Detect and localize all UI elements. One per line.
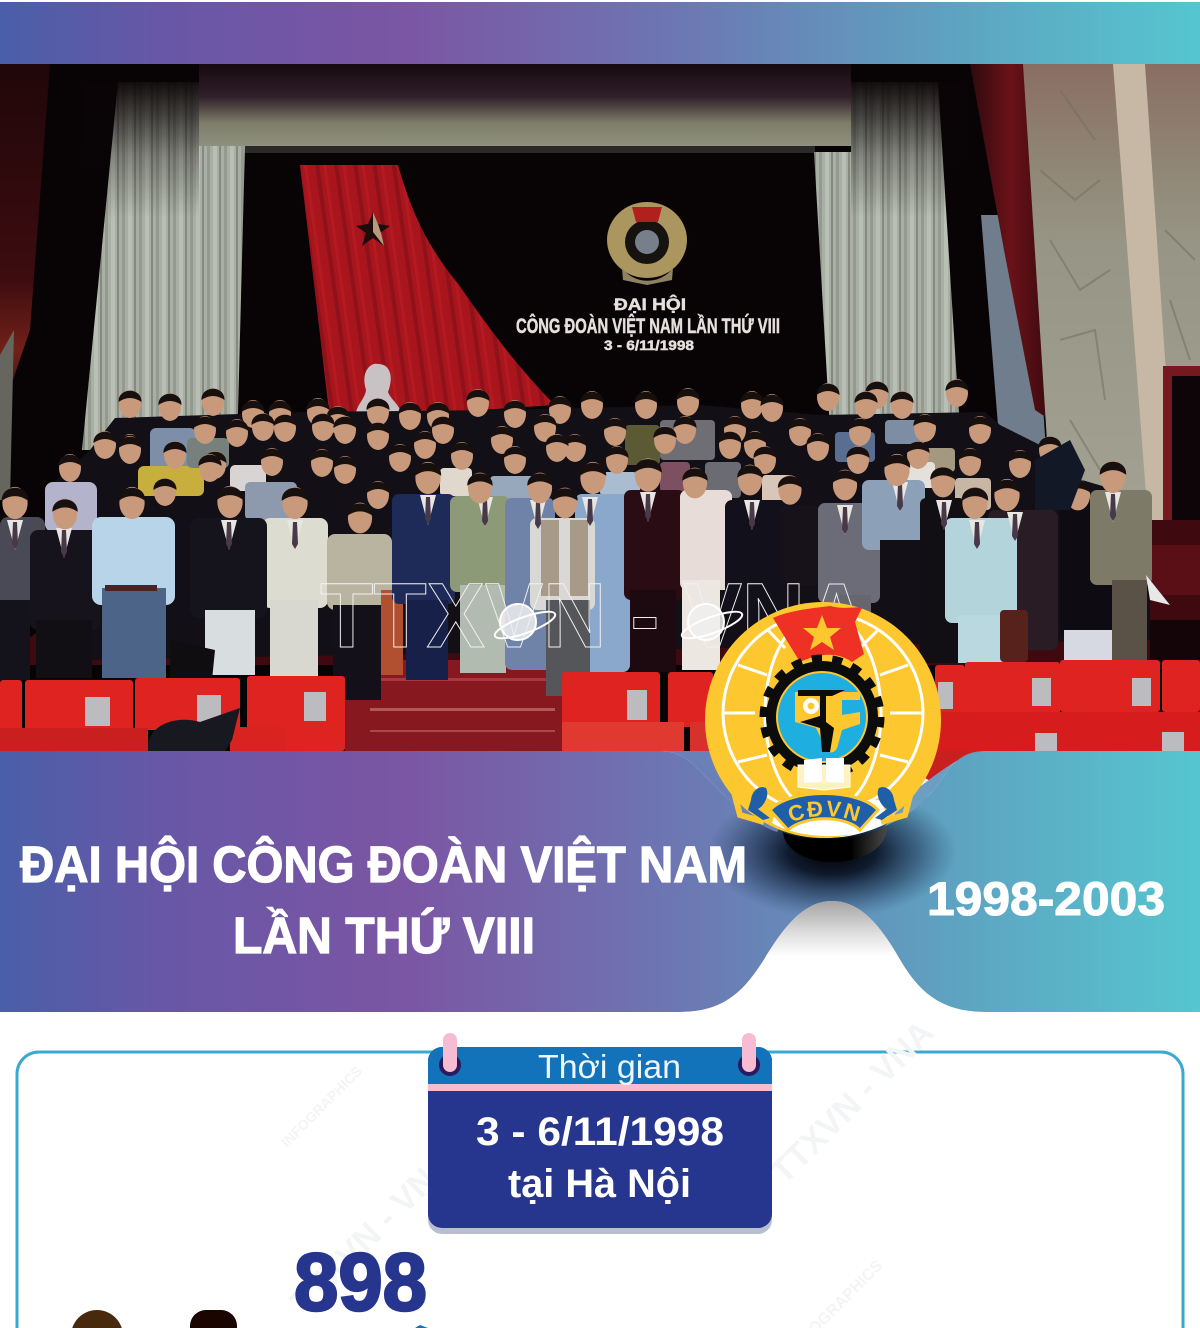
- marble veins: [1040, 90, 1195, 470]
- flag with star: [773, 606, 864, 662]
- faint watermarks: TTXVN - VNA: [283, 1143, 461, 1321]
- central red steps: [345, 660, 565, 751]
- bust statue: [355, 364, 402, 420]
- left white curtains: [82, 82, 245, 450]
- photo wedge beside emblem: [900, 751, 985, 792]
- red drape: [300, 165, 555, 420]
- calendar heading: Thời gian: [538, 1048, 681, 1085]
- side scrolls: [735, 787, 910, 822]
- title text: LẦN THỨ VIII: [233, 906, 535, 964]
- term years: 1998-2003: [927, 872, 1165, 925]
- bag on seats: [148, 708, 240, 751]
- left dark red curtain: [0, 64, 50, 420]
- faint watermarks: INFOGRAPHICS: [278, 1063, 365, 1150]
- gear: [763, 658, 881, 776]
- proscenium band: [199, 64, 851, 153]
- emblem: Vietnam trade union logo: [705, 602, 941, 838]
- top gradient bar: [0, 2, 1200, 64]
- watermark TTXVN - VNA: TTXVN - VNA: [320, 565, 868, 667]
- door frame: [1163, 366, 1200, 532]
- calendar card: time and place: [428, 1033, 772, 1234]
- dark figure and flowers at right: [1035, 440, 1170, 605]
- globe meridians: [723, 613, 923, 813]
- title banner with gradient and curved notches: [0, 751, 1200, 1012]
- date and place: 3 - 6/11/1998: [476, 1110, 724, 1154]
- right white curtains: [814, 82, 960, 430]
- date and place: [476, 1110, 724, 1206]
- date and place: tại Hà Nội: [508, 1162, 691, 1206]
- title text: [20, 835, 747, 964]
- faint watermarks: TTXVN - VNA: [763, 1013, 941, 1191]
- open book: [798, 758, 850, 790]
- red auditorium seats: [0, 660, 1200, 751]
- back rows of delegates: [45, 379, 1150, 660]
- white bell notch in banner: [680, 901, 985, 1012]
- stage banner text: CÔNG ĐOÀN VIỆT NAM LẦN THỨ VIII: [516, 314, 780, 338]
- title text: ĐẠI HỘI CÔNG ĐOÀN VIỆT NAM: [20, 835, 747, 893]
- photo: delegates group portrait on the congress stage: [0, 64, 1200, 751]
- star on drape: [356, 212, 390, 246]
- right lip of the notch: [885, 751, 985, 826]
- grey side panel: [981, 215, 1046, 450]
- delegates count: 898: [294, 1237, 427, 1328]
- left lip of the notch: [660, 751, 810, 832]
- front row of delegates: [0, 454, 1152, 700]
- icon: delegates' heads: [71, 1310, 237, 1328]
- label tip below count: [415, 1325, 428, 1328]
- info panel outline: [17, 1052, 1183, 1328]
- white lower sliver: [772, 800, 890, 836]
- ribbon with CĐVN: [772, 795, 880, 832]
- seat labels: [85, 678, 1184, 751]
- highlight sliver: [913, 778, 932, 796]
- marble wall: [1023, 64, 1200, 520]
- dark red stairs behind delegates: [0, 520, 1200, 665]
- ribbon with CĐVN: CĐVN: [788, 800, 860, 822]
- stage banner text: ĐẠI HỘI: [614, 295, 686, 314]
- calendar rings: [439, 1033, 760, 1076]
- stage banner text: 3 - 6/11/1998: [604, 337, 694, 353]
- right dark red curtain: [970, 64, 1050, 420]
- pillar: [1113, 64, 1176, 520]
- stage emblem: [607, 202, 687, 285]
- stage banner text: [516, 295, 780, 353]
- faint watermarks: [278, 1013, 941, 1328]
